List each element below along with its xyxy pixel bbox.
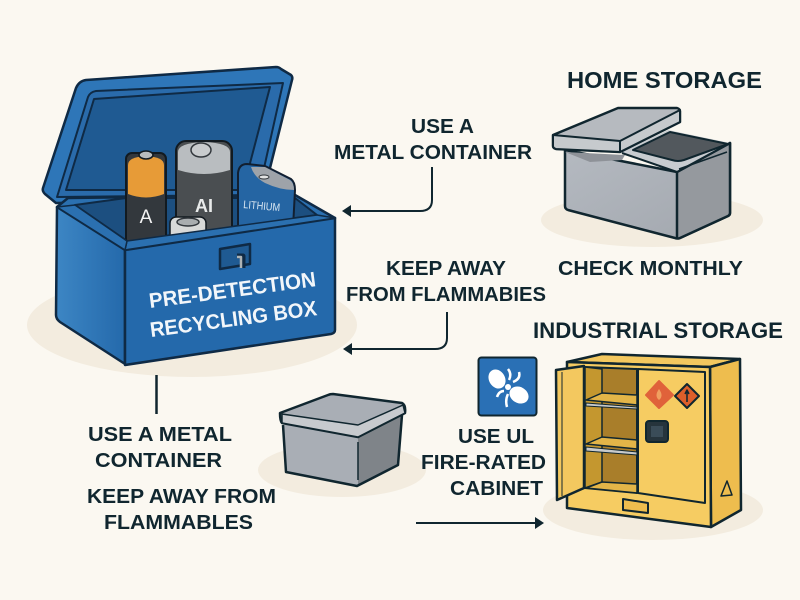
label: keep away from flammabies: FROM FLAMMABIES [346, 283, 546, 306]
hazard diamond: arrow [675, 384, 699, 408]
battery: orange AA: A [140, 207, 153, 228]
label: use UL fire-rated cabinet: FIRE-RATED [421, 451, 546, 474]
battery: small cell [170, 217, 206, 241]
battery: orange AA [126, 151, 166, 245]
label: use a metal container (top) [334, 115, 532, 164]
arrow: flammables to box [343, 312, 447, 355]
label: use UL fire-rated cabinet: USE UL [458, 425, 534, 448]
cabinet lock [646, 421, 668, 442]
arrow: metal container to box [342, 167, 432, 217]
label: use UL fire-rated cabinet: CABINET [450, 477, 543, 500]
box label: RECYCLING BOX [149, 297, 318, 342]
box body [56, 207, 125, 364]
box latch [220, 244, 250, 269]
cabinet left door [556, 366, 584, 500]
box label: PRE-DETECTION [148, 268, 317, 313]
box lid [43, 67, 292, 203]
heading: home storage: HOME STORAGE [567, 67, 762, 93]
arrow: to cabinet [416, 517, 544, 529]
illustration: home storage box [553, 108, 730, 238]
label: keep away from flammables: FLAMMABLES [104, 511, 253, 534]
label: use a metal container (top): USE A [411, 115, 474, 138]
connector line under main box [155, 375, 158, 414]
battery: gray cell: AI [195, 196, 213, 216]
ground shadow: main box [27, 273, 357, 377]
battery: lithium [238, 164, 295, 232]
illustration: blue recycling box with batteries [43, 67, 335, 365]
ground shadow: small box [258, 443, 426, 497]
base handle [623, 499, 648, 513]
icon: ventilation fan [478, 358, 536, 416]
label: keep away from flammables: KEEP AWAY FROM [87, 485, 276, 508]
box interior [57, 195, 335, 250]
label: use a metal container (bottom): CONTAINER [95, 449, 222, 472]
label: use a metal container (top): METAL CONTAINER [334, 141, 532, 164]
cabinet shelves [586, 393, 637, 405]
illustration: yellow flammables cabinet [556, 354, 741, 527]
ground shadow: cabinet [543, 480, 763, 540]
warning triangle [721, 481, 732, 496]
heading: industrial storage: INDUSTRIAL STORAGE [533, 318, 783, 343]
hazard diamond: flame [646, 381, 673, 408]
box label [148, 268, 318, 342]
label: keep away from flammabies: KEEP AWAY [386, 257, 506, 280]
label: keep away from flammables [87, 485, 276, 534]
ground shadow: home box [541, 193, 763, 247]
illustration: small gray box [280, 394, 405, 486]
cabinet right door [638, 369, 705, 503]
label: use UL fire-rated cabinet [421, 425, 546, 500]
label: use a metal container (bottom) [88, 423, 232, 472]
label: keep away from flammabies [346, 257, 546, 306]
battery: gray cell [176, 141, 232, 236]
label: use a metal container (bottom): USE A METAL [88, 423, 232, 446]
battery: lithium: LITHIUM [243, 199, 281, 214]
label: check monthly: CHECK MONTHLY [558, 257, 743, 280]
